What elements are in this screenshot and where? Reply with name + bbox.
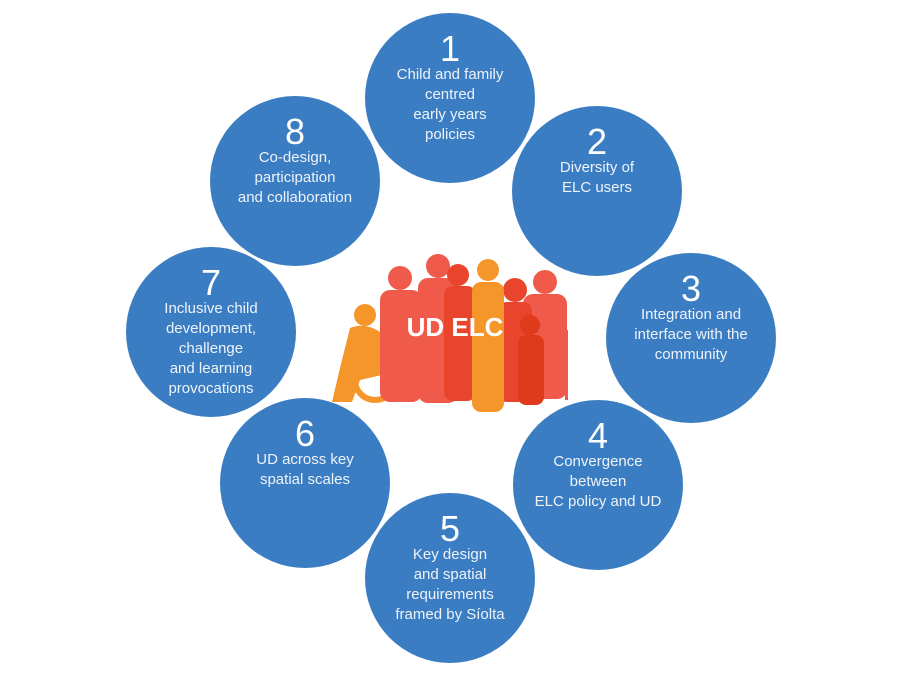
circle 1: policies xyxy=(425,126,475,143)
circle 7 xyxy=(126,247,296,417)
circle 4 xyxy=(513,400,683,570)
circle 3: interface with the xyxy=(634,326,748,343)
circle 8 xyxy=(210,96,380,266)
circle 7: provocations xyxy=(168,380,254,397)
wheelchair user xyxy=(332,304,395,402)
circle 2: Diversity of xyxy=(560,159,634,176)
circle 3: 3 xyxy=(681,268,701,309)
circle 1: Child and family xyxy=(397,66,503,83)
circle 5: requirements xyxy=(406,586,494,603)
circle 8: 8 xyxy=(285,111,305,152)
circle 7: and learning xyxy=(170,360,252,377)
label: UD ELC: UD ELC xyxy=(407,312,504,342)
circle 5: and spatial xyxy=(414,566,486,583)
circle 4: between xyxy=(570,473,626,490)
centre illustration: people silhouettes with UD ELC xyxy=(332,254,568,412)
circle 2: ELC users xyxy=(562,179,632,196)
circle 6 xyxy=(220,398,390,568)
circle 2: 2 xyxy=(587,121,607,162)
circle 8: participation xyxy=(255,169,335,186)
circle 7: development, xyxy=(166,320,256,337)
circle 5 xyxy=(365,493,535,663)
circle 6: 6 xyxy=(295,413,315,454)
circle 5: 5 xyxy=(440,508,460,549)
circle 6: spatial scales xyxy=(260,471,350,488)
circle 1 xyxy=(365,13,535,183)
circle 1: 1 xyxy=(440,28,460,69)
circle 3 xyxy=(606,253,776,423)
circle 4: ELC policy and UD xyxy=(535,493,661,510)
adults xyxy=(380,254,568,403)
circle 4: 4 xyxy=(588,415,608,456)
circle 4: Convergence xyxy=(553,453,643,470)
circle 3: community xyxy=(655,346,727,363)
circle 7: Inclusive child xyxy=(164,300,258,317)
circle 2 xyxy=(512,106,682,276)
circle 5: Key design xyxy=(413,546,487,563)
circle 8: Co-design, xyxy=(259,149,331,166)
circle 8: and collaboration xyxy=(238,189,352,206)
circle 3: Integration and xyxy=(641,306,741,323)
circle 7: 7 xyxy=(201,262,221,303)
circle 5: framed by Síolta xyxy=(395,606,505,623)
circle 1: centred xyxy=(425,86,475,103)
circle 7: challenge xyxy=(179,340,243,357)
circle 6: UD across key xyxy=(256,451,354,468)
circle 1: early years xyxy=(413,106,487,123)
